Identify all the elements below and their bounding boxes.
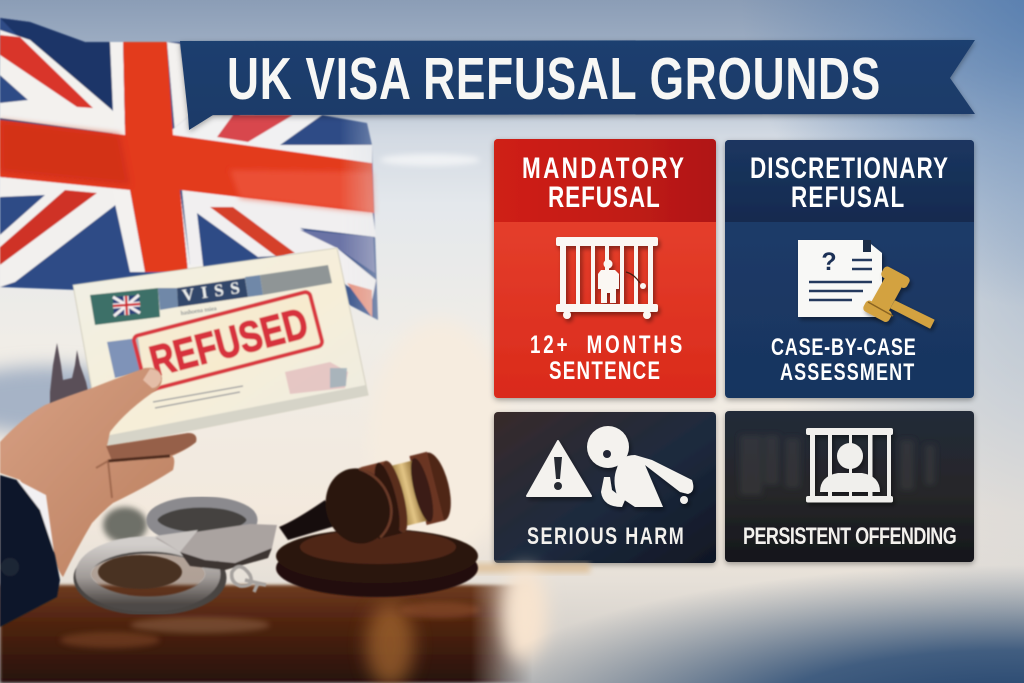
- text: case-by-case assessment: CASE-BY-CASE: [771, 335, 916, 361]
- hand holding passport: [0, 368, 196, 577]
- passport with refused stamp: [73, 248, 368, 447]
- panel: mandatory refusal: REFUSAL: [548, 180, 660, 214]
- visa emblem strip: [90, 265, 332, 325]
- icon: document and gavel: [798, 240, 934, 328]
- panel: mandatory refusal: [494, 139, 716, 398]
- panel: discretionary refusal: REFUSAL: [791, 180, 904, 214]
- banner with title: [180, 40, 975, 130]
- icon: warning triangle and harmed figure: [527, 426, 693, 507]
- panel: mandatory refusal: MANDATORY: [522, 151, 684, 185]
- gavel and sound block: [276, 447, 478, 597]
- panel: persistent offending: [725, 411, 974, 562]
- refused stamp: REFUSED: [145, 299, 313, 386]
- icon: document and gavel: ?: [821, 248, 837, 276]
- panel: discretionary refusal: [725, 140, 974, 398]
- panel: discretionary refusal: DISCRETIONARY: [750, 151, 948, 185]
- text: 12+ months sentence: 12+ MONTHS: [530, 330, 682, 359]
- distant cathedral silhouette: [50, 343, 90, 410]
- label: serious harm: SERIOUS HARM: [527, 524, 684, 550]
- label: persistent offending: PERSISTENT OFFENDING: [743, 524, 957, 550]
- visa emblem strip: hashoena nsiea: [180, 306, 217, 317]
- flag: Union Jack: [0, 18, 378, 320]
- table surface, left wood and right haze: [0, 560, 1024, 683]
- title: UK VISA REFUSAL GROUNDS: [227, 47, 880, 113]
- text: case-by-case assessment: [771, 335, 916, 386]
- visa emblem strip: VISS: [181, 278, 241, 305]
- text: case-by-case assessment: ASSESSMENT: [780, 360, 914, 386]
- handcuffs: [80, 502, 277, 609]
- text: 12+ months sentence: SENTENCE: [549, 356, 660, 385]
- panel: serious harm: [494, 412, 716, 563]
- suit sleeve and cuff: [0, 475, 60, 627]
- text: 12+ months sentence: [530, 330, 682, 385]
- icon: prisoner behind bars: [556, 237, 658, 319]
- icon: person behind bars: [806, 428, 893, 502]
